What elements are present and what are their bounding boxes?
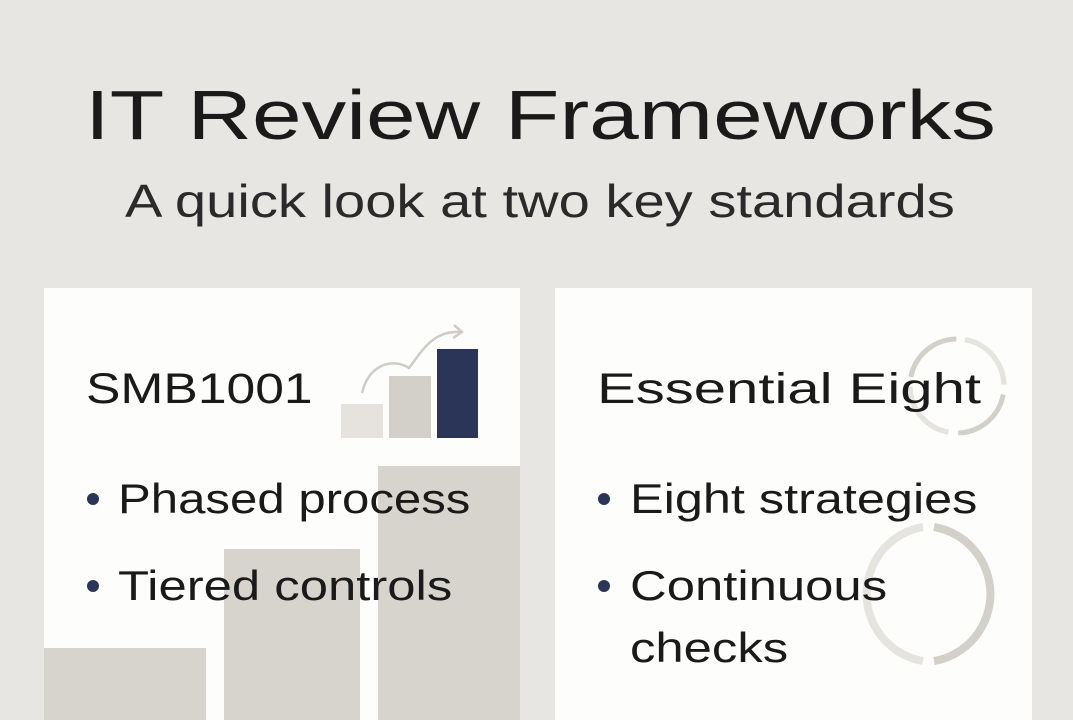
heading: Essential Eight xyxy=(597,365,981,413)
bullet: Tiered controls: Tiered controls xyxy=(118,562,452,609)
icon: growth bars xyxy=(341,324,478,438)
title: IT Review Frameworks xyxy=(85,76,996,154)
background bar chart xyxy=(44,466,520,720)
bullet: Eight strategies: Eight strategies xyxy=(630,475,977,522)
heading: SMB1001 xyxy=(86,365,313,413)
subtitle: A quick look at two key standards xyxy=(125,175,955,227)
icon: ring segments xyxy=(862,336,1006,665)
panel: Essential Eight xyxy=(555,288,1032,720)
bullet: Continuous checks: Continuous xyxy=(630,562,887,609)
bullet: Continuous checks xyxy=(598,562,887,671)
bullet: Continuous checks: checks xyxy=(630,624,788,671)
bullet: Phased process: Phased process xyxy=(118,475,470,522)
panel: SMB1001 xyxy=(44,288,520,720)
